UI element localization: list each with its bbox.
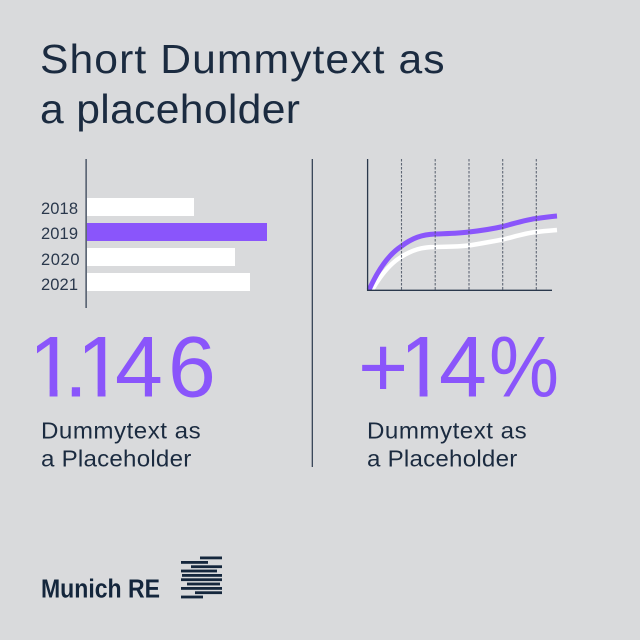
number: 1.146 xyxy=(28,320,216,416)
year labels: 2018 xyxy=(41,200,78,218)
panel: line chart xyxy=(368,159,557,290)
title: a placeholder xyxy=(40,86,300,132)
wordmark: Munich RE xyxy=(41,576,160,604)
stat: 1.146 xyxy=(37,336,212,466)
title: Short Dummytext as xyxy=(40,36,445,82)
title xyxy=(40,36,445,132)
line chart axes xyxy=(368,159,552,290)
divider xyxy=(312,159,313,467)
purple line xyxy=(369,216,557,290)
logo: Munich RE xyxy=(41,556,222,604)
year labels xyxy=(41,200,80,294)
caption xyxy=(41,419,201,472)
caption: a Placeholder xyxy=(41,447,191,472)
year labels: 2021 xyxy=(41,276,78,294)
stat: +14% xyxy=(362,336,556,466)
white line xyxy=(372,230,557,290)
bar chart axis xyxy=(86,159,87,308)
caption: Dummytext as xyxy=(41,419,201,444)
caption xyxy=(367,419,527,472)
dashed grid lines xyxy=(402,159,536,290)
number: % xyxy=(489,320,559,416)
number xyxy=(362,336,556,397)
number: +14 xyxy=(358,320,487,416)
infographic xyxy=(37,44,558,598)
caption: a Placeholder xyxy=(367,447,517,472)
year labels: 2020 xyxy=(41,251,80,269)
year labels: 2019 xyxy=(41,225,78,243)
panel: bar chart xyxy=(41,159,267,308)
bars xyxy=(87,198,267,291)
caption: Dummytext as xyxy=(367,419,527,444)
logo mark xyxy=(181,556,222,598)
